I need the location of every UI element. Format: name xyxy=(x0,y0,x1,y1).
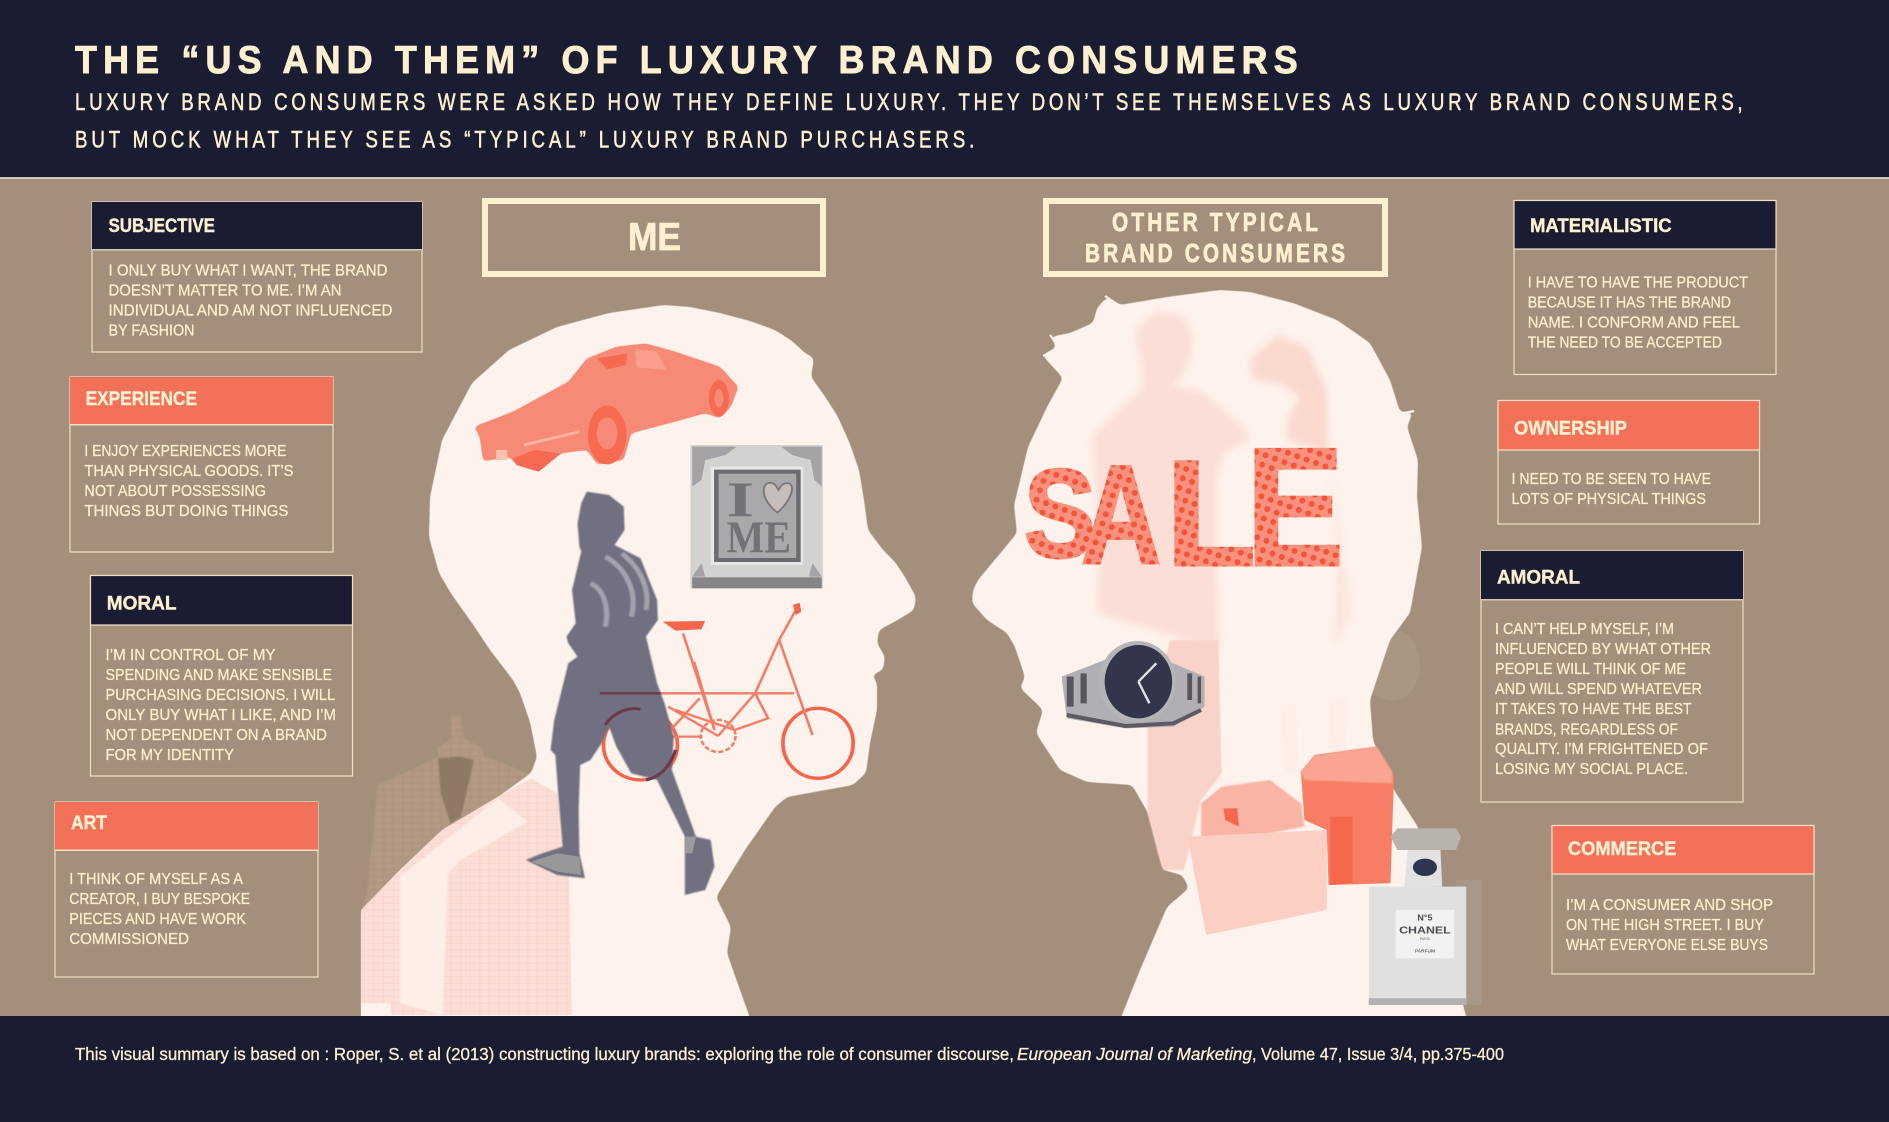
icon: shopping bags xyxy=(1187,747,1394,935)
panel: materialistic: MATERIALISTIC xyxy=(1530,215,1672,237)
icon: wrist watch xyxy=(1062,641,1205,728)
icon: sale sign: E xyxy=(1246,413,1344,601)
panel: materialistic xyxy=(1514,200,1776,374)
panel: commerce xyxy=(1552,826,1814,974)
icon: running man xyxy=(526,492,714,895)
panel: ownership: LOTS OF PHYSICAL THINGS xyxy=(1512,491,1706,508)
panel: amoral xyxy=(1481,551,1743,802)
footer band with citation: European Journal of Marketing xyxy=(1017,1044,1252,1064)
icon: framed I heart me picture: ME xyxy=(727,514,791,563)
panel: art: ART xyxy=(71,812,107,834)
icon: coral car xyxy=(474,343,738,472)
panel: amoral: PEOPLE WILL THINK OF ME xyxy=(1495,661,1686,678)
panel: moral: SPENDING AND MAKE SENSIBLE xyxy=(106,667,332,684)
icon: perfume bottle: PARFUM xyxy=(1415,949,1435,955)
panel: subjective: BY FASHION xyxy=(108,323,194,340)
pink jacket inside head xyxy=(361,778,572,1015)
panel: subjective: INDIVIDUAL AND AM NOT INFLUENCED xyxy=(108,303,392,320)
hair wisps xyxy=(1043,296,1414,414)
panel: ownership: OWNERSHIP xyxy=(1514,418,1627,440)
head silhouette: me xyxy=(361,305,916,1040)
panel: other typical brand consumers label: OTHER TYPICAL xyxy=(1112,208,1318,237)
panel: subjective: I ONLY BUY WHAT I WANT, THE BRAND xyxy=(108,263,388,280)
panel: commerce: COMMERCE xyxy=(1568,838,1676,860)
panel: art: I THINK OF MYSELF AS A xyxy=(69,871,243,888)
panel: materialistic: I HAVE TO HAVE THE PRODUCT xyxy=(1528,274,1748,291)
panel: commerce: ON THE HIGH STREET. I BUY xyxy=(1566,917,1764,934)
icon: sale sign: A xyxy=(1081,436,1161,593)
panel: experience: I ENJOY EXPERIENCES MORE xyxy=(84,443,286,460)
panel: experience: THINGS BUT DOING THINGS xyxy=(84,503,288,520)
panel: amoral: INFLUENCED BY WHAT OTHER xyxy=(1495,641,1711,658)
panel: other typical brand consumers label: BRAND CONSUMERS xyxy=(1085,239,1345,268)
head silhouette: other consumers xyxy=(972,290,1472,1040)
panel: ownership xyxy=(1498,400,1760,524)
panel: amoral: AND WILL SPEND WHATEVER xyxy=(1495,681,1702,698)
panel: materialistic: NAME. I CONFORM AND FEEL xyxy=(1528,314,1740,331)
panel: ME label xyxy=(485,201,823,274)
footer band with citation: , Volume 47, Issue 3/4, pp.375-400 xyxy=(1252,1044,1504,1064)
panel: art: PIECES AND HAVE WORK xyxy=(69,911,246,928)
panel: ME label: ME xyxy=(628,216,681,259)
panel: subjective: DOESN’T MATTER TO ME. I’M AN xyxy=(108,283,342,300)
footer band with citation xyxy=(0,1016,1889,1122)
icon: sale sign: S xyxy=(1024,445,1096,584)
panel: experience: THAN PHYSICAL GOODS. IT’S xyxy=(84,463,293,480)
icon: perfume bottle: N°5 xyxy=(1417,913,1433,923)
panel: experience: EXPERIENCE xyxy=(86,388,197,410)
subtitle: BUT MOCK WHAT THEY SEE AS “TYPICAL” LUXURY BRAND PURCHASERS. xyxy=(75,126,974,153)
panel: experience: NOT ABOUT POSSESSING xyxy=(84,483,266,500)
icon: framed I heart me picture: I xyxy=(727,472,754,527)
icon: sale sign xyxy=(1024,413,1344,601)
panel: moral: NOT DEPENDENT ON A BRAND xyxy=(106,727,327,744)
panel: materialistic: THE NEED TO BE ACCEPTED xyxy=(1528,334,1722,351)
panel: art xyxy=(55,802,318,977)
panel: amoral: LOSING MY SOCIAL PLACE. xyxy=(1495,761,1688,778)
panel: moral xyxy=(90,576,352,776)
couple ghost image xyxy=(1092,312,1353,650)
subtitle xyxy=(75,89,1743,153)
panel: experience xyxy=(70,377,333,552)
icon: perfume bottle: CHANEL xyxy=(1399,925,1451,936)
icon: perfume bottle: PARIS xyxy=(1420,937,1431,941)
panel: amoral: BRANDS, REGARDLESS OF xyxy=(1495,721,1678,738)
icon: bicycle xyxy=(600,603,853,780)
couple legs xyxy=(1148,640,1349,870)
panel: amoral: IT TAKES TO HAVE THE BEST xyxy=(1495,701,1692,718)
panel: moral: MORAL xyxy=(107,592,177,614)
panel: amoral: I CAN’T HELP MYSELF, I’M xyxy=(1495,621,1674,638)
panel: other typical brand consumers label xyxy=(1046,201,1385,274)
icon: sale sign: L xyxy=(1166,429,1256,597)
panel: amoral: QUALITY. I’M FRIGHTENED OF xyxy=(1495,741,1708,758)
subtitle: LUXURY BRAND CONSUMERS WERE ASKED HOW THEY DEFINE LUXURY. THEY DON’T SEE THEMSELVES AS LUXURY BRAND CONSUMERS, xyxy=(75,89,1743,116)
header band xyxy=(0,0,1889,179)
icon: perfume bottle xyxy=(1369,828,1482,1005)
panel: art: COMMISSIONED xyxy=(69,931,189,948)
jacket behind head xyxy=(361,715,535,910)
panel: art: CREATOR, I BUY BESPOKE xyxy=(69,891,250,908)
panel: commerce: I’M A CONSUMER AND SHOP xyxy=(1566,897,1773,914)
panel: subjective: SUBJECTIVE xyxy=(108,215,215,237)
panel: moral: FOR MY IDENTITY xyxy=(106,747,234,764)
panel: ownership: I NEED TO BE SEEN TO HAVE xyxy=(1512,471,1711,488)
faint shape beside neck xyxy=(1364,629,1420,701)
panel: moral: ONLY BUY WHAT I LIKE, AND I’M xyxy=(106,707,336,724)
panel: moral: I’M IN CONTROL OF MY xyxy=(106,647,276,664)
panel: amoral: AMORAL xyxy=(1497,567,1580,589)
panel: materialistic: BECAUSE IT HAS THE BRAND xyxy=(1528,294,1731,311)
icon: framed I heart me picture xyxy=(690,445,823,588)
panel: moral: PURCHASING DECISIONS. I WILL xyxy=(106,687,335,704)
title: THE “US AND THEM” OF LUXURY BRAND CONSUMERS xyxy=(75,38,1298,81)
panel: subjective xyxy=(92,202,422,352)
panel: commerce: WHAT EVERYONE ELSE BUYS xyxy=(1566,937,1768,954)
footer band with citation: This visual summary is based on : Roper, S. et al (2013) constructing luxury brands: exploring the role of consumer discourse, xyxy=(75,1044,1014,1064)
